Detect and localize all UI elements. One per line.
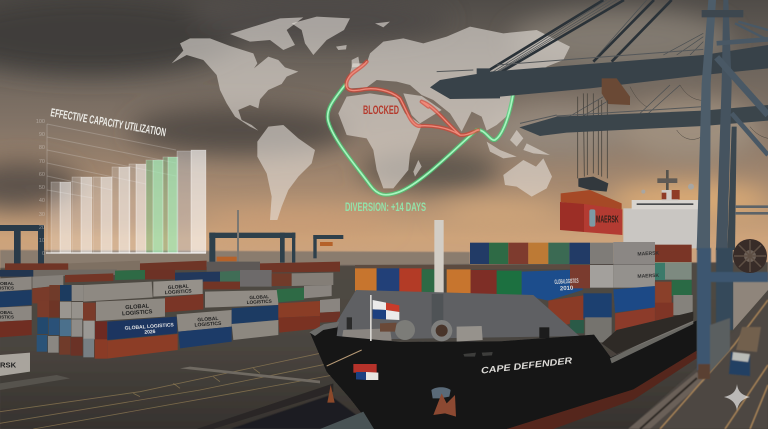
- bar 7 green: [163, 157, 178, 253]
- map: Madagascar: [413, 160, 422, 177]
- far-left container stack: OBAL: [0, 281, 14, 287]
- bar 4: [112, 167, 130, 253]
- top tier: [470, 243, 489, 264]
- map: Eurasia: [345, 27, 570, 132]
- leg B lower: [716, 248, 733, 330]
- hull: [310, 321, 697, 429]
- spreader: [578, 177, 608, 192]
- chart axis labels: 10: [39, 238, 45, 244]
- second tier: [355, 268, 377, 291]
- gantry crane foreground: [430, 0, 768, 250]
- central container stack with end walls: GLOBAL: [197, 316, 219, 323]
- chart axis labels: 100: [36, 119, 45, 125]
- crane trolley: [602, 78, 630, 105]
- map: Africa: [338, 93, 422, 188]
- quay edge: [197, 383, 333, 429]
- central container stack with end walls: LOGISTICS: [165, 288, 193, 296]
- bollard cone: [327, 385, 335, 403]
- chart axis labels: 60: [39, 172, 45, 178]
- map: Iceland: [336, 45, 347, 50]
- bar 8: [177, 151, 191, 253]
- ship deck containers: MAERSK: [637, 250, 660, 258]
- crane feet: [698, 364, 710, 379]
- map: Arabian peninsula: [403, 93, 442, 123]
- right container stack: [205, 285, 340, 340]
- gantry crane left: [0, 225, 44, 275]
- mooring rope: [327, 350, 362, 366]
- leg A lower: [697, 248, 711, 370]
- bar 5: [129, 164, 146, 253]
- map: Indonesia and Philippines: [487, 130, 550, 158]
- right quay: [628, 292, 768, 429]
- cable reel: [733, 239, 767, 273]
- anchor: [431, 387, 451, 398]
- yard surface: [0, 262, 768, 429]
- water: [230, 395, 375, 429]
- central container stack with end walls: LOGISTICS: [194, 321, 222, 329]
- truck trailer: [736, 327, 761, 352]
- gantry crane right: [313, 235, 343, 258]
- ship deck containers: [355, 242, 693, 342]
- third and fourth tiers: [548, 295, 583, 325]
- cargo ship Cape Defender: [309, 220, 697, 429]
- lower boom: [519, 105, 768, 136]
- map: South America: [257, 125, 315, 220]
- chart axis labels: [36, 119, 45, 257]
- chart axis labels: 70: [39, 159, 45, 165]
- capacity utilization chart: [36, 107, 206, 257]
- chart axis labels: 30: [39, 212, 45, 218]
- deck machinery: [342, 317, 549, 342]
- bow deck plating: [333, 290, 579, 340]
- ship deck containers: GLOBALOGISTICS: [554, 278, 579, 286]
- central container stack with end walls: LOGISTICS: [122, 309, 153, 317]
- far-left container stack: OBAL: [0, 310, 13, 315]
- bow rim: [309, 322, 339, 336]
- right container stack: GLOBAL: [249, 294, 269, 300]
- far-left container stack: ISTICS: [0, 285, 14, 290]
- bar 3: [93, 177, 112, 253]
- gantry crane centre: [209, 233, 295, 263]
- map: arctic islands: [230, 17, 303, 50]
- label: diversion +14 days: DIVERSION: +14 DAYS: [345, 202, 426, 214]
- truck cab: [729, 352, 750, 376]
- crane ties: [487, 0, 672, 72]
- chart axis labels: 20: [39, 225, 45, 231]
- right water: [733, 280, 768, 330]
- panama flag: [370, 295, 399, 341]
- chart title: EFFECTIVE CAPACITY UTILIZATION: [49, 107, 167, 139]
- chart base: [46, 252, 206, 254]
- crane crossbar: [711, 272, 768, 282]
- hull waterline: [507, 351, 697, 429]
- bar 1: [51, 182, 71, 253]
- crane braces: [717, 22, 768, 213]
- map: Svalbard: [375, 22, 390, 27]
- far-left container stack: [0, 275, 63, 337]
- crane top frame: [702, 10, 743, 17]
- diversion route: green: [328, 85, 513, 195]
- ship deck containers: MAERSK: [637, 273, 660, 280]
- hawse fittings: [463, 352, 493, 357]
- chart grid: [47, 124, 176, 253]
- sky background: [0, 0, 768, 280]
- world map: [172, 17, 570, 220]
- central container stack with end walls: [37, 279, 232, 359]
- right container stack: LOGISTICS: [247, 299, 272, 305]
- rear container rows: [0, 261, 340, 289]
- crane legs lower: [697, 248, 768, 379]
- water glint: [320, 412, 374, 429]
- central container stack with end walls: GLOBAL: [168, 284, 189, 291]
- yard road markings: [0, 353, 333, 429]
- Maersk container: [560, 190, 622, 235]
- light pole: [237, 210, 239, 273]
- near container RSK: [0, 353, 30, 376]
- crane base: [710, 318, 730, 372]
- bar 9: [191, 150, 206, 253]
- chart axis labels: 50: [39, 185, 45, 191]
- truck: [729, 327, 761, 376]
- map: UK: [352, 57, 360, 67]
- port horizon and yard: [0, 250, 768, 429]
- near container RSK: RSK: [0, 360, 17, 369]
- hull painted flag: [353, 364, 378, 380]
- ship name: CAPE DEFENDER: [480, 355, 573, 376]
- white ship behind: [623, 170, 703, 248]
- map: North America: [172, 38, 298, 131]
- far-left container stack: ISTICS: [0, 315, 14, 320]
- label: blocked: BLOCKED: [363, 105, 399, 117]
- hoist cables: [578, 85, 768, 178]
- ship mast: [434, 220, 444, 293]
- upper boom: [430, 45, 768, 99]
- chart axis labels: 0: [42, 251, 45, 257]
- central container stack with end walls: GLOBAL: [125, 303, 150, 311]
- chart axis labels: 40: [39, 198, 45, 204]
- Maersk container: MAERSK: [596, 215, 619, 226]
- map: Australia: [503, 158, 552, 197]
- chart axis labels: 90: [39, 132, 45, 138]
- bar 2: [72, 177, 92, 253]
- container deck shade: [355, 265, 582, 269]
- crane legs: [697, 0, 716, 250]
- central container stack with end walls: GLOBAL LOGISTICS: [125, 322, 175, 332]
- ship deck containers: 2010: [560, 286, 574, 292]
- blocked route: red: [346, 62, 478, 135]
- central container stack with end walls: 2026: [144, 329, 156, 336]
- container yard: [0, 210, 343, 429]
- distant buildings: [0, 250, 470, 285]
- sparkle icon: [724, 384, 750, 411]
- deck rail: [610, 318, 693, 363]
- bar 6 green: [146, 160, 163, 253]
- chart axis labels: 80: [39, 145, 45, 151]
- bars: [51, 150, 206, 253]
- map: Greenland: [292, 17, 350, 55]
